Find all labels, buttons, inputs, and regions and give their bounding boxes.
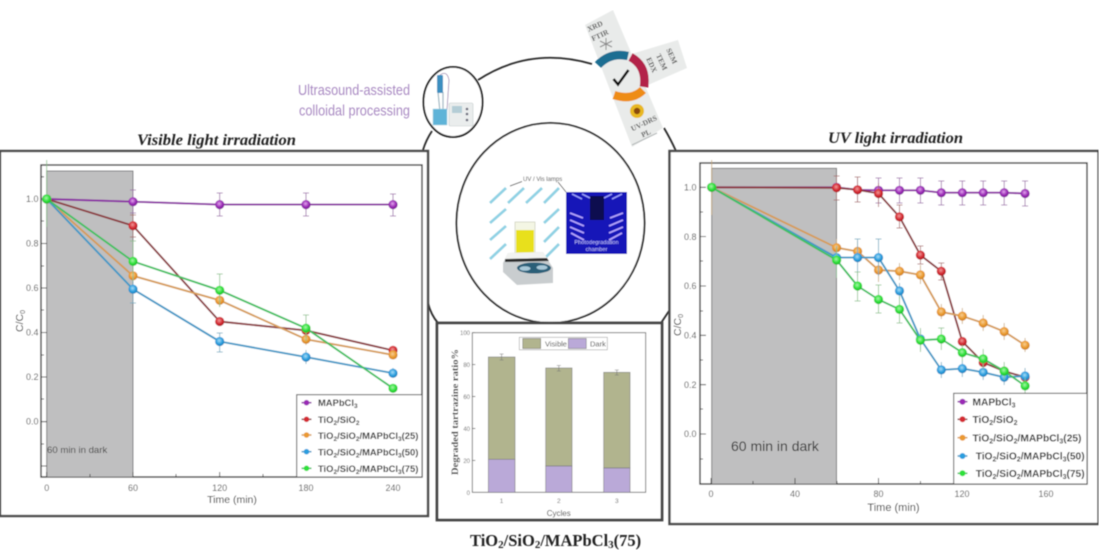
heading: visible light irradiation: Visible light irradiation [137, 132, 296, 149]
icon: characterisation cross with XRD, SEM, UV-DRS labels: EDX [644, 56, 659, 75]
legend: UV chart: 2 [1014, 438, 1018, 446]
heading: ultrasound-assisted colloidal processing [298, 83, 410, 120]
icon: characterisation cross with XRD, SEM, UV-DRS labels: XRD [586, 18, 605, 34]
y axis labels: 0.2 [26, 372, 39, 382]
x axis title: Time (min) [867, 502, 920, 514]
heading: ultrasound-assisted colloidal processing: Ultrasound-assisted [298, 83, 410, 99]
legend: visible chart: (50) [402, 446, 418, 458]
legend: UV chart: /SiO [993, 415, 1014, 426]
x axis labels: 120 [954, 489, 970, 499]
bar: cycle 3 [604, 370, 630, 492]
heading: UV light irradiation: UV light irradiation [828, 130, 963, 147]
icon: characterisation cross with XRD, SEM, UV-DRS labels: TEM [654, 52, 669, 72]
x axis labels [44, 483, 401, 493]
series: TiO2/SiO2/MAPbCl3(50) visible [47, 199, 393, 378]
legend: visible chart: 2 [333, 452, 337, 460]
legend: visible chart: TiO [318, 414, 333, 425]
legend: visible chart: (25) [402, 430, 418, 441]
series: TiO2/SiO2/MAPbCl3(25) UV [712, 160, 1025, 352]
legend: visible and dark: Dark [590, 340, 606, 348]
caption: composite name: /MAPbCl [539, 531, 609, 550]
legend: UV chart: /MAPbCl [1018, 434, 1060, 444]
dark period shading [712, 168, 837, 484]
legend: visible chart: /SiO [337, 463, 356, 474]
x axis labels: 40 [790, 489, 800, 499]
x axis labels [500, 498, 619, 505]
legend: UV chart: 2 [1017, 456, 1021, 464]
y axis labels: 0.4 [684, 330, 697, 340]
legend: UV chart: 2 [1017, 474, 1021, 481]
x axis labels: 0 [44, 483, 49, 493]
legend: visible chart: 3 [398, 469, 402, 476]
legend: visible and dark: Visible [545, 340, 567, 348]
bar: cycle 1 [488, 354, 515, 492]
legend: UV chart: 3 [1059, 438, 1063, 446]
legend: UV chart: (25) [1063, 434, 1081, 444]
x axis labels: 60 [128, 483, 138, 493]
icon: beaker on magnetic stirrer [503, 222, 553, 285]
x axis labels: 240 [385, 483, 401, 493]
legend: visible chart: 3 [398, 452, 402, 460]
series: TiO2/SiO2 visible [47, 199, 393, 350]
y axis labels: 100 [460, 331, 471, 337]
caption: composite name: /SiO [503, 531, 535, 550]
series: MAPbCl3 UV [712, 178, 1028, 206]
legend: UV chart: 2 [989, 438, 993, 446]
legend: visible chart: 2 [356, 469, 360, 476]
caption: composite name: (75) [614, 531, 641, 550]
panel: visible light chart [0, 132, 428, 516]
legend: UV chart: /MAPbCl [1021, 452, 1063, 462]
series: TiO2/SiO2/MAPbCl3(75) visible [47, 160, 393, 388]
y axis labels: 0.6 [26, 283, 39, 293]
y axis labels: 0.0 [684, 429, 697, 439]
legend: visible chart: /SiO [337, 414, 356, 425]
x axis labels: 160 [1038, 489, 1054, 499]
legend: visible chart: TiO [318, 463, 333, 474]
y axis labels: 0.2 [684, 380, 697, 390]
y axis labels: 80 [463, 363, 471, 369]
y axis title: C/C [14, 314, 26, 332]
y axis labels: 0 [467, 491, 471, 497]
y axis labels: 0.8 [26, 238, 39, 248]
legend: UV chart: TiO [972, 434, 989, 444]
y axis labels: 1.0 [684, 182, 697, 192]
legend: UV chart [954, 393, 1087, 484]
y axis labels [26, 194, 39, 427]
legend: UV chart: 2 [989, 420, 993, 427]
y axis labels [684, 182, 697, 439]
icon: characterisation cross with XRD, SEM, UV-DRS labels: PL [640, 127, 652, 139]
legend: visible chart: 2 [333, 420, 337, 427]
legend: UV chart: (75) [1066, 469, 1085, 480]
icon: photodegradation chamber [566, 192, 627, 254]
y axis labels [460, 331, 471, 497]
x axis labels: 1 [500, 498, 504, 505]
legend: UV chart: MAPbCl [972, 398, 1012, 408]
legend: visible chart: TiO [318, 430, 333, 441]
panel: photoreactor circle [456, 123, 644, 323]
y axis title: 0 [678, 314, 685, 318]
series: TiO2/SiO2 UV [712, 176, 1025, 377]
series: TiO2/SiO2/MAPbCl3(25) visible [47, 199, 393, 355]
x axis title: Time (min) [207, 494, 257, 506]
x axis labels: 0 [708, 489, 714, 499]
legend: visible chart: 2 [333, 469, 337, 476]
legend: visible chart: (75) [402, 463, 418, 474]
x axis labels: 120 [212, 483, 227, 493]
y axis labels: 1.0 [26, 194, 39, 204]
series: MAPbCl3 visible [47, 190, 396, 216]
legend: UV chart: 3 [1012, 402, 1016, 410]
icon: photodegradation chamber: Photodegradation [574, 240, 619, 246]
x axis labels [708, 489, 1054, 499]
legend: visible chart: 2 [356, 436, 360, 443]
legend: UV chart: /SiO [996, 469, 1017, 480]
bar: cycle 2 [546, 366, 572, 492]
legend: visible chart: 2 [333, 436, 337, 443]
y axis labels: 20 [463, 459, 471, 465]
legend: visible chart [297, 395, 422, 477]
dark period shading: 60 min in dark [731, 438, 820, 454]
legend: UV chart: TiO [976, 452, 992, 462]
icon: ultrasound processor in ellipse [424, 67, 482, 137]
caption: composite name: TiO [470, 531, 498, 550]
legend: UV chart: 2 [1014, 420, 1018, 427]
y axis title: 0 [20, 310, 27, 314]
y axis title: Degraded tartrazine ratio% [450, 349, 461, 475]
legend: visible chart: /MAPbCl [359, 463, 398, 474]
dark period shading: 60 min in dark [47, 445, 107, 456]
x axis labels: 3 [615, 498, 619, 505]
x axis labels: 80 [873, 489, 884, 499]
legend: UV chart: /SiO [993, 434, 1014, 444]
lamp label [510, 177, 566, 192]
legend: UV chart: /SiO [996, 452, 1017, 462]
legend: visible chart: MAPbCl [318, 397, 354, 408]
icon: characterisation cross with XRD, SEM, UV-DRS labels [585, 10, 687, 147]
y axis labels: 60 [463, 395, 471, 401]
legend: visible chart: 2 [356, 452, 360, 460]
legend: UV chart: 2 [992, 456, 996, 464]
x axis title: Cycles [547, 509, 571, 518]
legend: visible chart: /SiO [337, 446, 356, 458]
y axis labels: 40 [463, 427, 471, 433]
panel: reusability bar chart [437, 323, 662, 520]
panel: UV light chart [670, 130, 1098, 524]
series: TiO2/SiO2/MAPbCl3(50) UV [712, 187, 1025, 385]
icon: characterisation cross with XRD, SEM, UV-DRS labels: FTIR [590, 27, 610, 43]
heading: ultrasound-assisted colloidal processing: colloidal processing [299, 104, 410, 120]
legend: visible chart: 2 [356, 420, 360, 427]
legend: visible chart: /MAPbCl [359, 430, 398, 441]
legend: visible chart: /SiO [337, 430, 356, 441]
y axis labels: 0.6 [684, 281, 697, 291]
y axis labels: 0.8 [684, 232, 697, 242]
legend: UV chart: 2 [992, 474, 996, 481]
legend: visible chart: /MAPbCl [359, 446, 398, 458]
legend: UV chart: TiO [972, 415, 989, 426]
y axis labels: 0.0 [26, 417, 39, 427]
y axis title: C/C [672, 318, 684, 336]
x axis labels: 180 [298, 483, 314, 493]
legend: visible chart: 3 [398, 436, 402, 443]
series: TiO2/SiO2/MAPbCl3(75) UV [712, 187, 1025, 393]
legend: visible and dark [519, 337, 607, 350]
legend: UV chart: 3 [1063, 474, 1067, 481]
x axis labels: 2 [557, 498, 561, 505]
legend: UV chart: 3 [1063, 456, 1067, 464]
lamp dashes [490, 188, 559, 259]
connector arcs between the process steps [423, 58, 676, 323]
legend: UV chart: /MAPbCl [1021, 469, 1063, 480]
dark period shading [47, 171, 133, 477]
icon: characterisation cross with XRD, SEM, UV-DRS labels: UV-DRS [629, 113, 658, 133]
legend: UV chart: TiO [976, 469, 992, 480]
legend: UV chart: (50) [1066, 452, 1085, 462]
icon: characterisation cross with XRD, SEM, UV-DRS labels: SEM [664, 47, 679, 65]
legend: visible chart: 3 [354, 403, 358, 410]
lamp label: UV / Vis lamps [523, 177, 562, 183]
icon: photodegradation chamber: chamber [586, 247, 608, 253]
legend: visible chart: TiO [318, 446, 333, 458]
y axis labels: 0.4 [26, 328, 39, 338]
